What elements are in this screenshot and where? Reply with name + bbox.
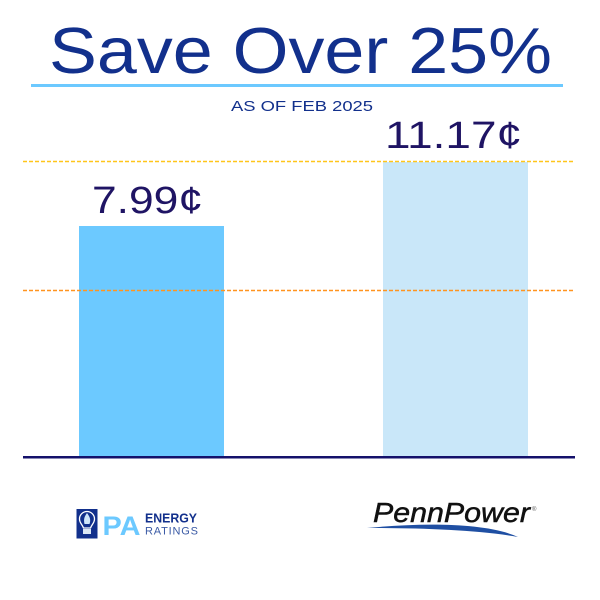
subtitle: date: AS OF FEB 2025 (231, 98, 373, 115)
bar: PA Energy Ratings rate (79, 226, 224, 457)
logo word: RATINGS: RATINGS (145, 526, 198, 538)
logo letters: PA: PA (102, 511, 140, 541)
logo registered mark: ® (532, 506, 537, 513)
icon: light bulb (76, 509, 98, 538)
logo wordmark: PennPower (373, 497, 532, 528)
logo: PA Energy Ratings (76, 509, 198, 541)
reference line: upper (23, 160, 575, 162)
chart baseline (23, 456, 575, 458)
value label: 11.17 cents: 11.17¢ (385, 115, 522, 157)
logo: Penn Power (367, 497, 537, 537)
logo word: ENERGY: ENERGY (145, 510, 197, 526)
title: Save Over 25% (49, 14, 552, 87)
bar: Penn Power rate (383, 162, 528, 457)
value label: 7.99 cents: 7.99¢ (92, 180, 203, 222)
reference line: lower (23, 290, 574, 292)
logo swoosh (367, 525, 518, 537)
title underline (31, 84, 563, 87)
